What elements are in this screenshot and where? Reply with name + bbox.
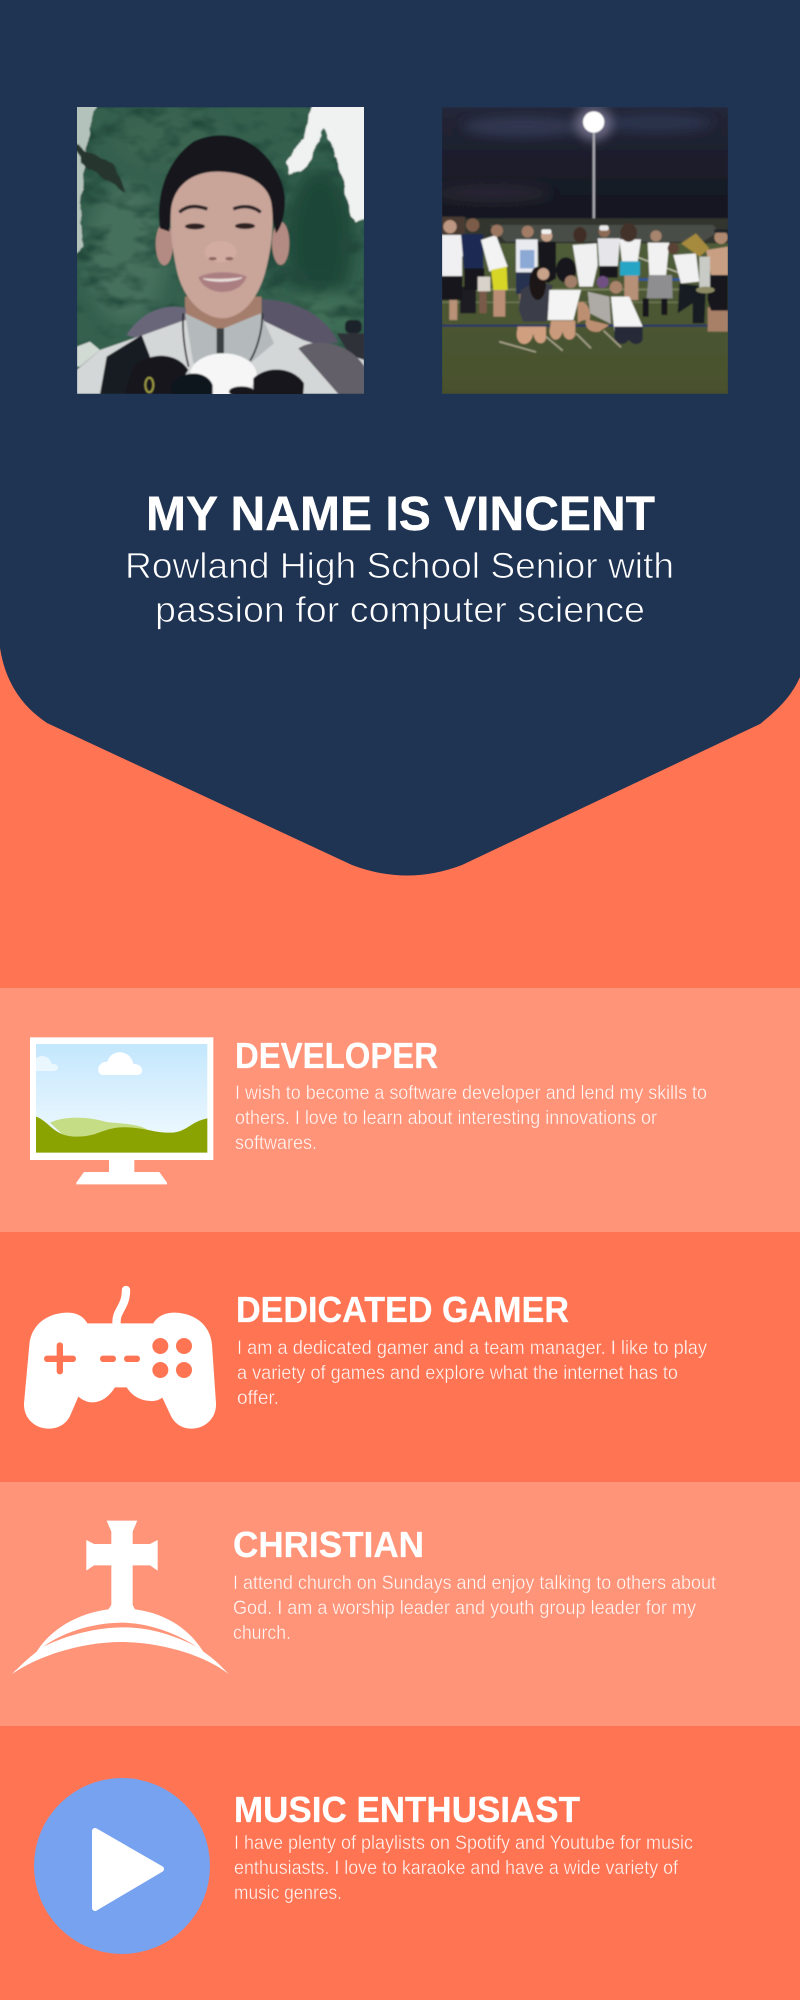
panel: dedicated gamer [0, 1232, 800, 1482]
subtitle: passion for computer science [155, 589, 645, 630]
title: MY NAME IS VINCENT [146, 488, 655, 541]
head [156, 223, 173, 265]
icon: play button [34, 1778, 210, 1954]
heading: music enthusiast: MUSIC ENTHUSIAST [234, 1789, 580, 1830]
gloves and ball [190, 353, 257, 397]
text: gamer description: I am a dedicated gamer and a team manager. I like to play [237, 1338, 707, 1359]
text: gamer description [237, 1338, 707, 1409]
text: christian description: I attend church on Sundays and enjoy talking to others about [233, 1573, 717, 1594]
text: music description [234, 1833, 693, 1904]
photo: portrait of Vincent [73, 103, 370, 397]
text: music description: I have plenty of playlists on Spotify and Youtube for music [234, 1833, 693, 1854]
text: gamer description: a variety of games and explore what the internet has to [237, 1363, 678, 1384]
stadium stands [464, 218, 728, 244]
text: developer description: I wish to become a software developer and lend my skills to [235, 1083, 707, 1104]
icon: game controller [24, 1290, 216, 1429]
text: christian description: God. I am a worship leader and youth group leader for my [233, 1598, 696, 1619]
text: music description: enthusiasts. I love to karaoke and have a wide variety of [234, 1858, 679, 1879]
icon: cross on a hill [12, 1521, 229, 1674]
subtitle: Rowland High School Senior with [125, 545, 674, 586]
subtitle [125, 545, 674, 630]
photo: marching band on field at night [436, 107, 728, 394]
standing people [442, 218, 728, 332]
seated people [499, 257, 643, 352]
panel: music enthusiast [0, 1726, 800, 2000]
text: developer description [235, 1083, 707, 1154]
text: gamer description: offer. [237, 1388, 279, 1409]
text: christian description [233, 1573, 717, 1644]
text: music description: music genres. [234, 1883, 342, 1904]
jacket [77, 320, 364, 394]
header panel: navy pentagon [0, 0, 800, 876]
text: developer description: others. I love to learn about interesting innovations or [235, 1108, 658, 1129]
icon: desktop monitor [30, 1037, 213, 1184]
text: christian description: church. [233, 1623, 291, 1644]
panel: developer [0, 988, 800, 1232]
panel: christian [0, 1482, 800, 1726]
text: developer description: softwares. [235, 1133, 317, 1154]
heading: dedicated gamer: DEDICATED GAMER [236, 1289, 569, 1330]
neck and fur [185, 297, 262, 333]
heading: christian: CHRISTIAN [233, 1524, 424, 1565]
heading: developer: DEVELOPER [235, 1035, 438, 1076]
